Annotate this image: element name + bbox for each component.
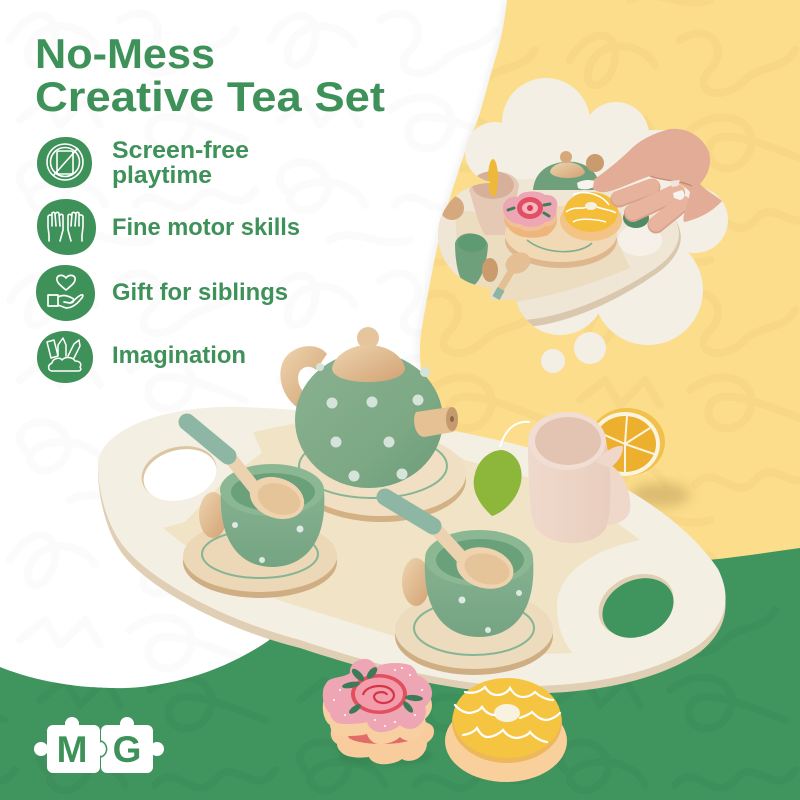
lid knob bbox=[357, 327, 379, 349]
text: Fine motor skills: Fine motor skills bbox=[112, 214, 300, 241]
mini mug bbox=[469, 172, 519, 235]
text: Gift for siblings: Gift for siblings bbox=[112, 279, 288, 306]
text: Screen-free playtime bbox=[112, 137, 249, 189]
tray shadow bbox=[630, 483, 690, 507]
mini biscuit bbox=[560, 192, 622, 241]
saucer bbox=[183, 520, 337, 598]
title: Creative Tea Set bbox=[35, 73, 385, 120]
teapot handle bbox=[280, 346, 327, 408]
text: Screen-free playtime: playtime bbox=[112, 162, 212, 189]
mini spoon bbox=[506, 252, 530, 274]
teapot dots bbox=[316, 363, 430, 482]
cup inside bbox=[436, 539, 524, 581]
cup body bbox=[221, 490, 324, 567]
inner wood panel bbox=[163, 423, 640, 655]
tray with holes bbox=[98, 407, 726, 693]
mini green cup behind fingers bbox=[623, 208, 649, 228]
left cup set bbox=[183, 422, 337, 598]
cup handle bbox=[199, 492, 227, 538]
title bbox=[35, 30, 385, 120]
icon: heart and hand bbox=[36, 265, 95, 321]
icon: no screens bbox=[37, 137, 92, 188]
cloud shape bbox=[438, 78, 728, 345]
mini pot bbox=[533, 162, 600, 190]
cup inside bbox=[231, 473, 315, 511]
thought bubbles bbox=[541, 332, 606, 373]
teapot body bbox=[295, 352, 443, 488]
lemon slice bbox=[589, 408, 665, 476]
mini flower cookie bbox=[503, 191, 557, 238]
hand bbox=[577, 129, 722, 225]
teapot saucer bbox=[296, 432, 466, 522]
cup dots bbox=[232, 522, 304, 563]
filling bbox=[348, 728, 416, 744]
fingers bbox=[619, 186, 682, 225]
mug body bbox=[528, 440, 610, 543]
left hole bbox=[136, 439, 222, 508]
nails bbox=[577, 180, 594, 189]
logo: MG puzzle pieces bbox=[34, 717, 164, 773]
mug bbox=[528, 412, 630, 543]
saucer bbox=[395, 591, 553, 675]
pink top bbox=[323, 659, 432, 732]
logo: MG puzzle pieces: G bbox=[113, 729, 141, 770]
cup dots bbox=[458, 590, 522, 633]
lower layer bbox=[331, 709, 434, 764]
thought bubble with photo bbox=[430, 78, 728, 373]
back of hand and thumb bbox=[590, 129, 722, 222]
right hole bbox=[588, 562, 684, 649]
right cup set bbox=[385, 497, 553, 675]
cup handle bbox=[402, 558, 430, 606]
background: yellow wave bbox=[416, 0, 800, 620]
spoon bbox=[385, 497, 518, 595]
tray rim bbox=[98, 411, 726, 693]
mug handle bbox=[597, 462, 630, 525]
mini lemon bbox=[488, 159, 498, 197]
background: green wave bbox=[0, 548, 800, 800]
cup body bbox=[425, 558, 533, 637]
leaves bbox=[342, 665, 423, 715]
flower cookie bbox=[323, 659, 434, 765]
sprinkles bbox=[333, 667, 423, 727]
feature list bbox=[36, 137, 300, 383]
mug rim bbox=[528, 412, 606, 470]
tea bag leaf bbox=[474, 422, 530, 516]
upper edge bbox=[323, 671, 432, 744]
photo: tray and tea set inside cloud bbox=[430, 151, 681, 327]
title: No-Mess bbox=[35, 30, 215, 77]
mini green cup bbox=[455, 233, 488, 287]
spoon bbox=[187, 422, 310, 526]
teapot lid bbox=[332, 345, 405, 382]
mini saucer bbox=[505, 237, 617, 268]
icon: hands bbox=[37, 199, 96, 255]
text: Screen-free playtime: Screen-free bbox=[112, 137, 249, 164]
logo: MG puzzle pieces: M bbox=[57, 729, 87, 770]
rose bbox=[351, 674, 407, 714]
tray top bbox=[98, 407, 726, 686]
icon: imagination bbox=[37, 331, 93, 383]
yellow biscuit bbox=[445, 678, 567, 782]
text: Imagination: Imagination bbox=[112, 342, 246, 369]
spout bbox=[414, 407, 458, 437]
teapot set bbox=[280, 327, 466, 522]
